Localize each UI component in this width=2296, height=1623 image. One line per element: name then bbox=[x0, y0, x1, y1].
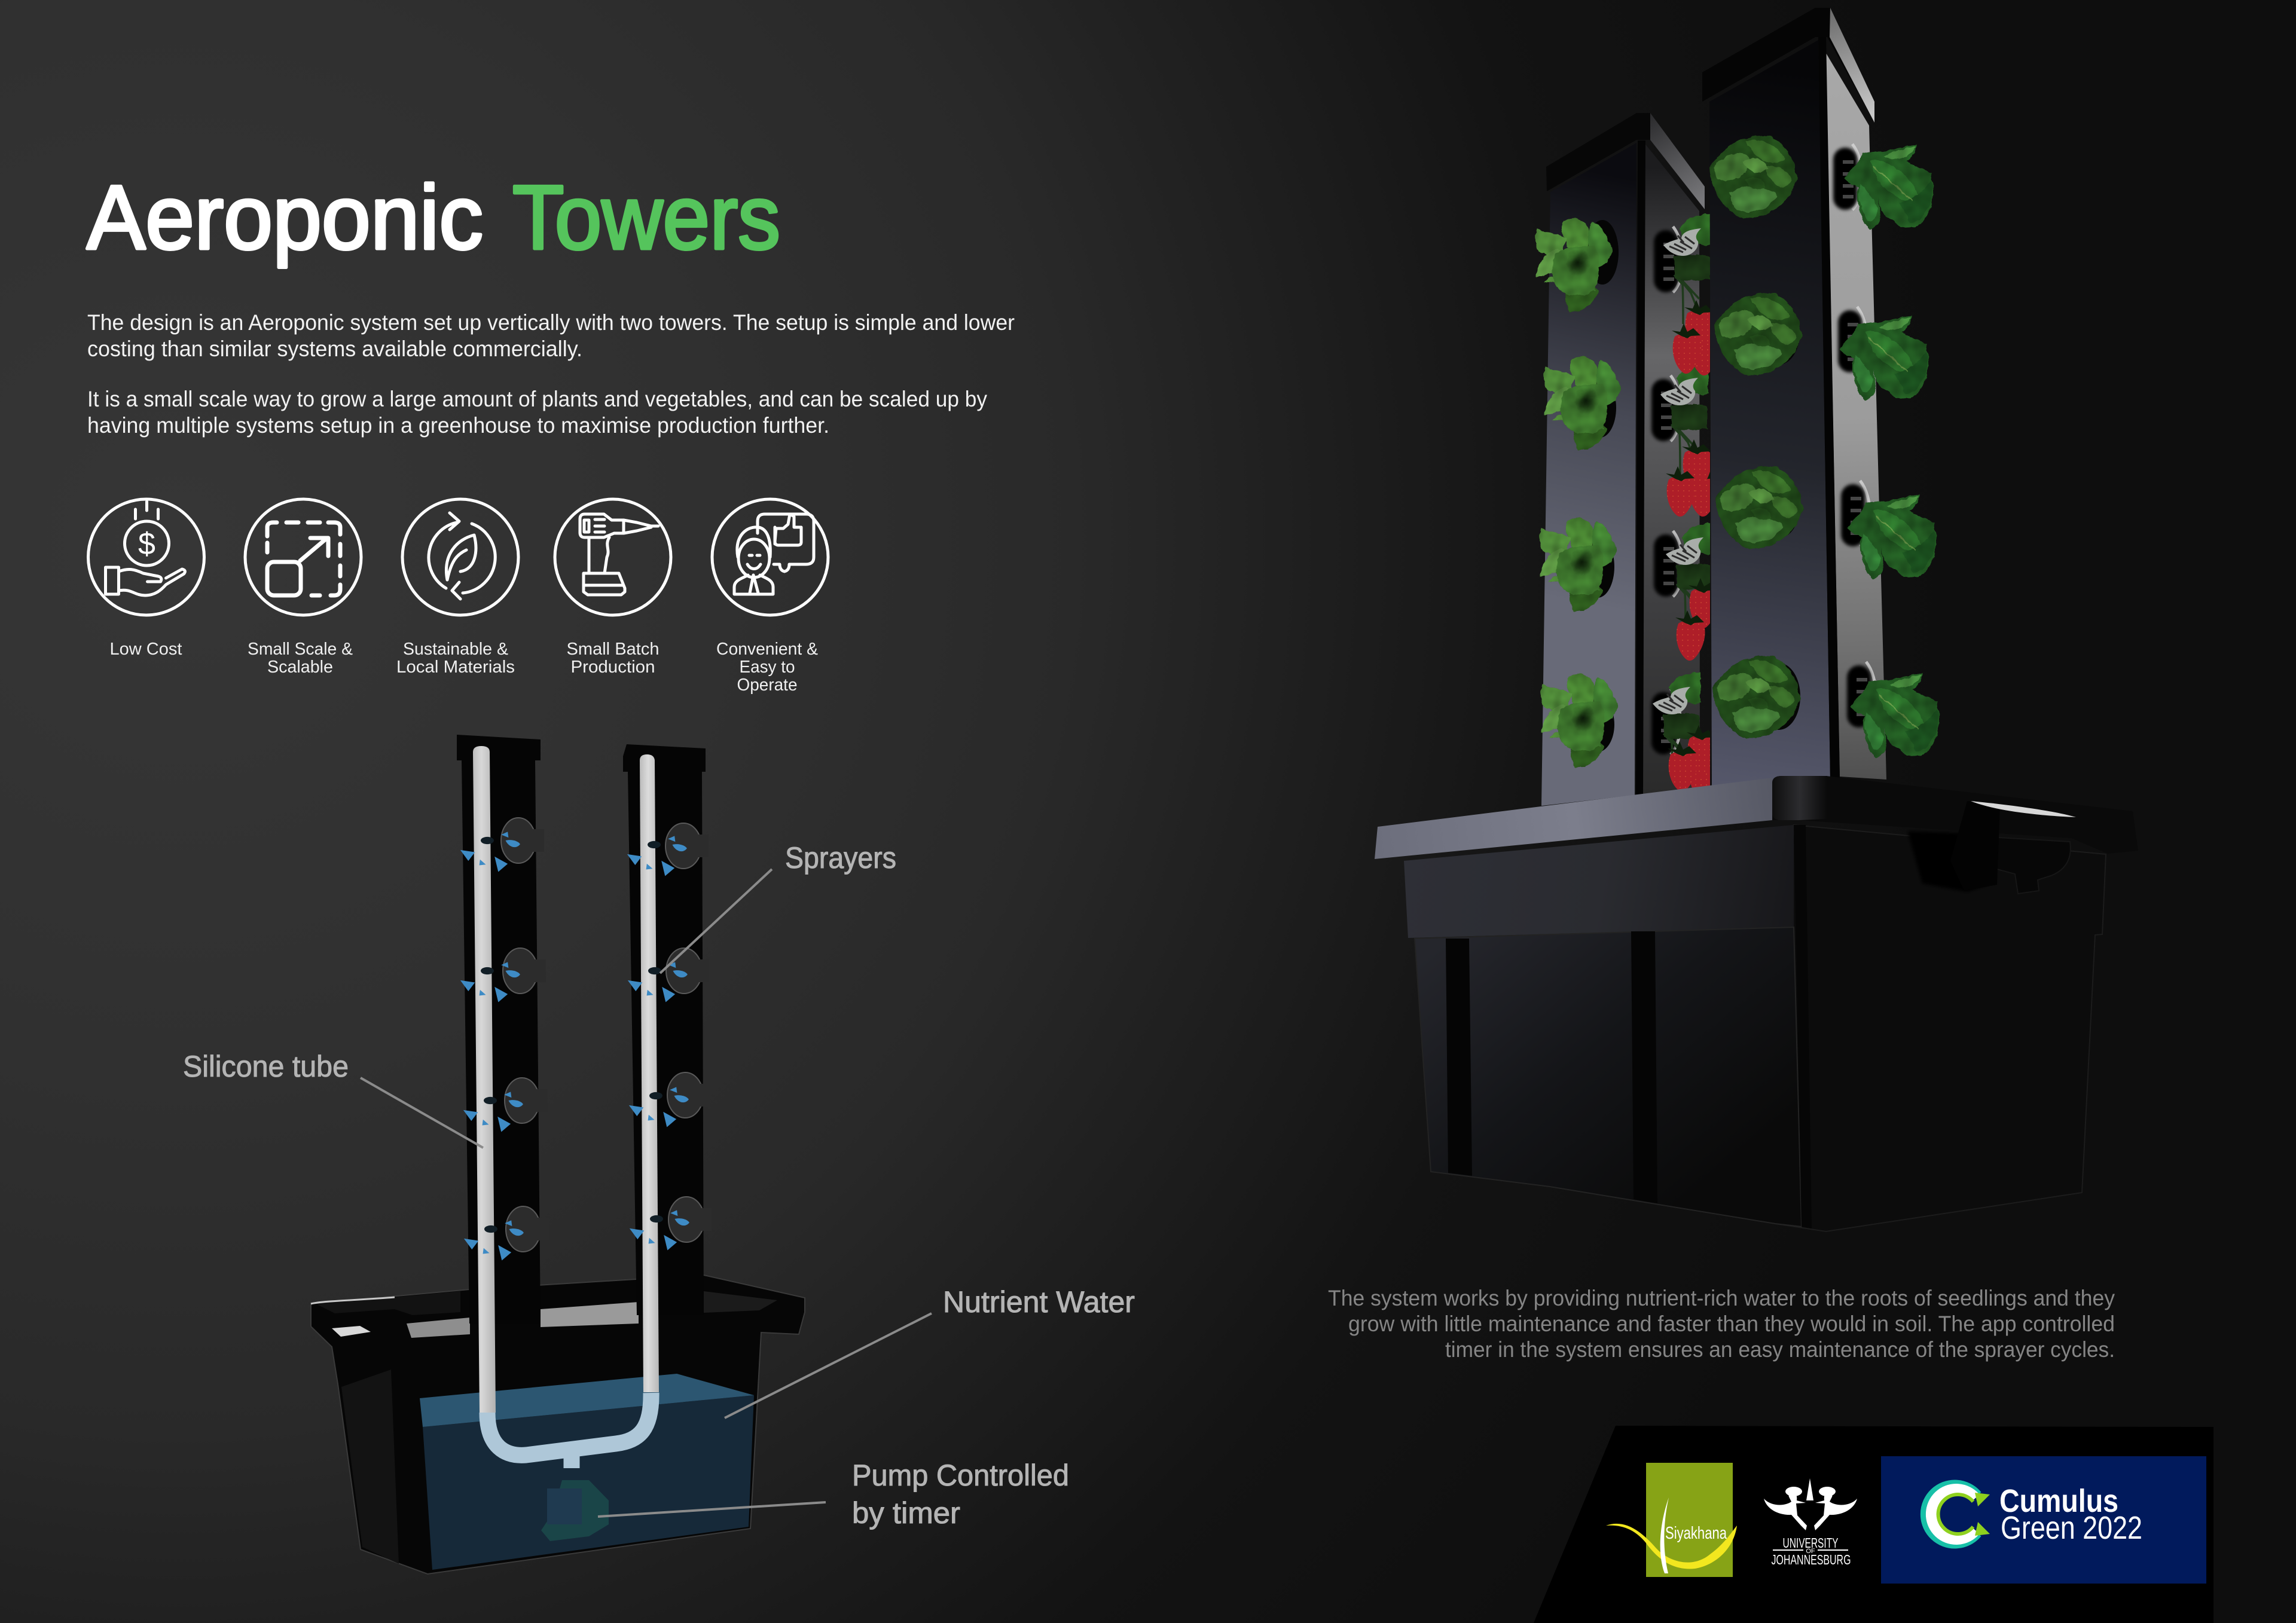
icon labels: Small Batch bbox=[567, 640, 659, 659]
icon: low cost bbox=[88, 499, 204, 615]
logo: University of Johannesburg: JOHANNESBURG bbox=[1771, 1552, 1851, 1567]
silicone tube left bbox=[473, 746, 496, 1413]
romaine on front tower bbox=[1839, 145, 1939, 758]
icon labels bbox=[110, 640, 818, 695]
title: Aeroponic bbox=[87, 167, 483, 268]
diagram labels: Silicone tube bbox=[183, 1050, 349, 1083]
reservoir box bbox=[1404, 825, 2106, 1231]
logo: Cumulus Green 2022: Green 2022 bbox=[2001, 1510, 2142, 1546]
basil on front tower bbox=[1709, 135, 1803, 738]
container rim highlights bbox=[311, 1291, 777, 1338]
lettuce on back tower bbox=[1535, 218, 1620, 768]
front tower sockets and dark holes bbox=[1752, 144, 1876, 730]
sprayers right tower bbox=[627, 836, 689, 1250]
pump bbox=[541, 1480, 609, 1541]
render: aeroponic towers bbox=[1375, 8, 2138, 1231]
title bbox=[87, 167, 780, 268]
front tower bbox=[1702, 8, 1886, 787]
logo: Cumulus Green 2022: Cumulus bbox=[1999, 1483, 2118, 1519]
logo: Cumulus Green 2022 bbox=[1881, 1456, 2206, 1584]
icon: scalable bbox=[245, 499, 361, 615]
logo: University of Johannesburg: UNIVERSITY bbox=[1783, 1535, 1838, 1551]
logo panel bbox=[1534, 1426, 2213, 1623]
diagram labels: Nutrient Water bbox=[943, 1285, 1135, 1319]
reservoir lid bbox=[1375, 776, 2138, 891]
container left wall shade bbox=[341, 1370, 399, 1564]
right tower section bbox=[623, 744, 706, 1315]
intro text: It is a small scale way to grow a large amount of plants and vegetables, and can be scaled up by bbox=[87, 387, 987, 411]
container body bbox=[311, 1275, 805, 1574]
water surface bbox=[420, 1374, 754, 1427]
icon: drill bbox=[555, 499, 671, 615]
system description: The system works by providing nutrient-rich water to the roots of seedlings and they bbox=[1328, 1286, 2115, 1310]
back tower sockets and dark holes bbox=[1581, 220, 1683, 754]
cutaway diagram bbox=[311, 735, 932, 1574]
system description bbox=[1328, 1286, 2115, 1362]
logo: Siyakhana: Siyakhana bbox=[1665, 1524, 1727, 1543]
intro text: costing than similar systems available commercially. bbox=[87, 337, 582, 361]
diagram labels: Sprayers bbox=[785, 841, 896, 875]
strawberry plants bbox=[1653, 213, 1710, 790]
back tower bbox=[1541, 113, 1705, 806]
silicone tube right bbox=[640, 754, 659, 1392]
icon labels: Local Materials bbox=[396, 658, 515, 677]
icon labels: Small Scale & bbox=[248, 640, 353, 659]
logo: University of Johannesburg: OF bbox=[1806, 1548, 1815, 1555]
icon labels: Scalable bbox=[267, 658, 333, 677]
system description: grow with little maintenance and faster than they would in soil. The app controlled bbox=[1348, 1312, 2115, 1336]
icon: convenient bbox=[712, 499, 828, 615]
logo: University of Johannesburg bbox=[1764, 1478, 1857, 1567]
left tower section bbox=[457, 735, 541, 1324]
diagram labels: by timer bbox=[852, 1496, 960, 1530]
water front face bbox=[423, 1395, 754, 1570]
feature icons row bbox=[88, 499, 828, 615]
icon labels: Operate bbox=[737, 676, 798, 695]
icon labels: Easy to bbox=[739, 658, 795, 677]
icon labels: Convenient & bbox=[716, 640, 818, 659]
diagram labels bbox=[183, 841, 1135, 1530]
sprayers left tower bbox=[460, 832, 524, 1260]
submerged tube bbox=[487, 1393, 651, 1468]
diagram labels: Pump Controlled bbox=[852, 1459, 1069, 1492]
intro text: The design is an Aeroponic system set up vertically with two towers. The setup is simple and lower bbox=[87, 310, 1015, 335]
system description: timer in the system ensures an easy maintenance of the sprayer cycles. bbox=[1445, 1337, 2115, 1362]
icon labels: Low Cost bbox=[110, 640, 182, 659]
icon: sustainable bbox=[402, 499, 518, 615]
leader lines bbox=[361, 869, 932, 1517]
icon labels: Sustainable & bbox=[403, 640, 508, 659]
icon: low cost: $ bbox=[138, 527, 155, 561]
logo: Siyakhana bbox=[1606, 1463, 1737, 1577]
intro text: having multiple systems setup in a greenhouse to maximise production further. bbox=[87, 413, 829, 438]
intro text bbox=[87, 310, 1015, 438]
icon labels: Production bbox=[570, 658, 655, 677]
title: Towers bbox=[512, 167, 780, 268]
tower holes bbox=[501, 818, 712, 1252]
